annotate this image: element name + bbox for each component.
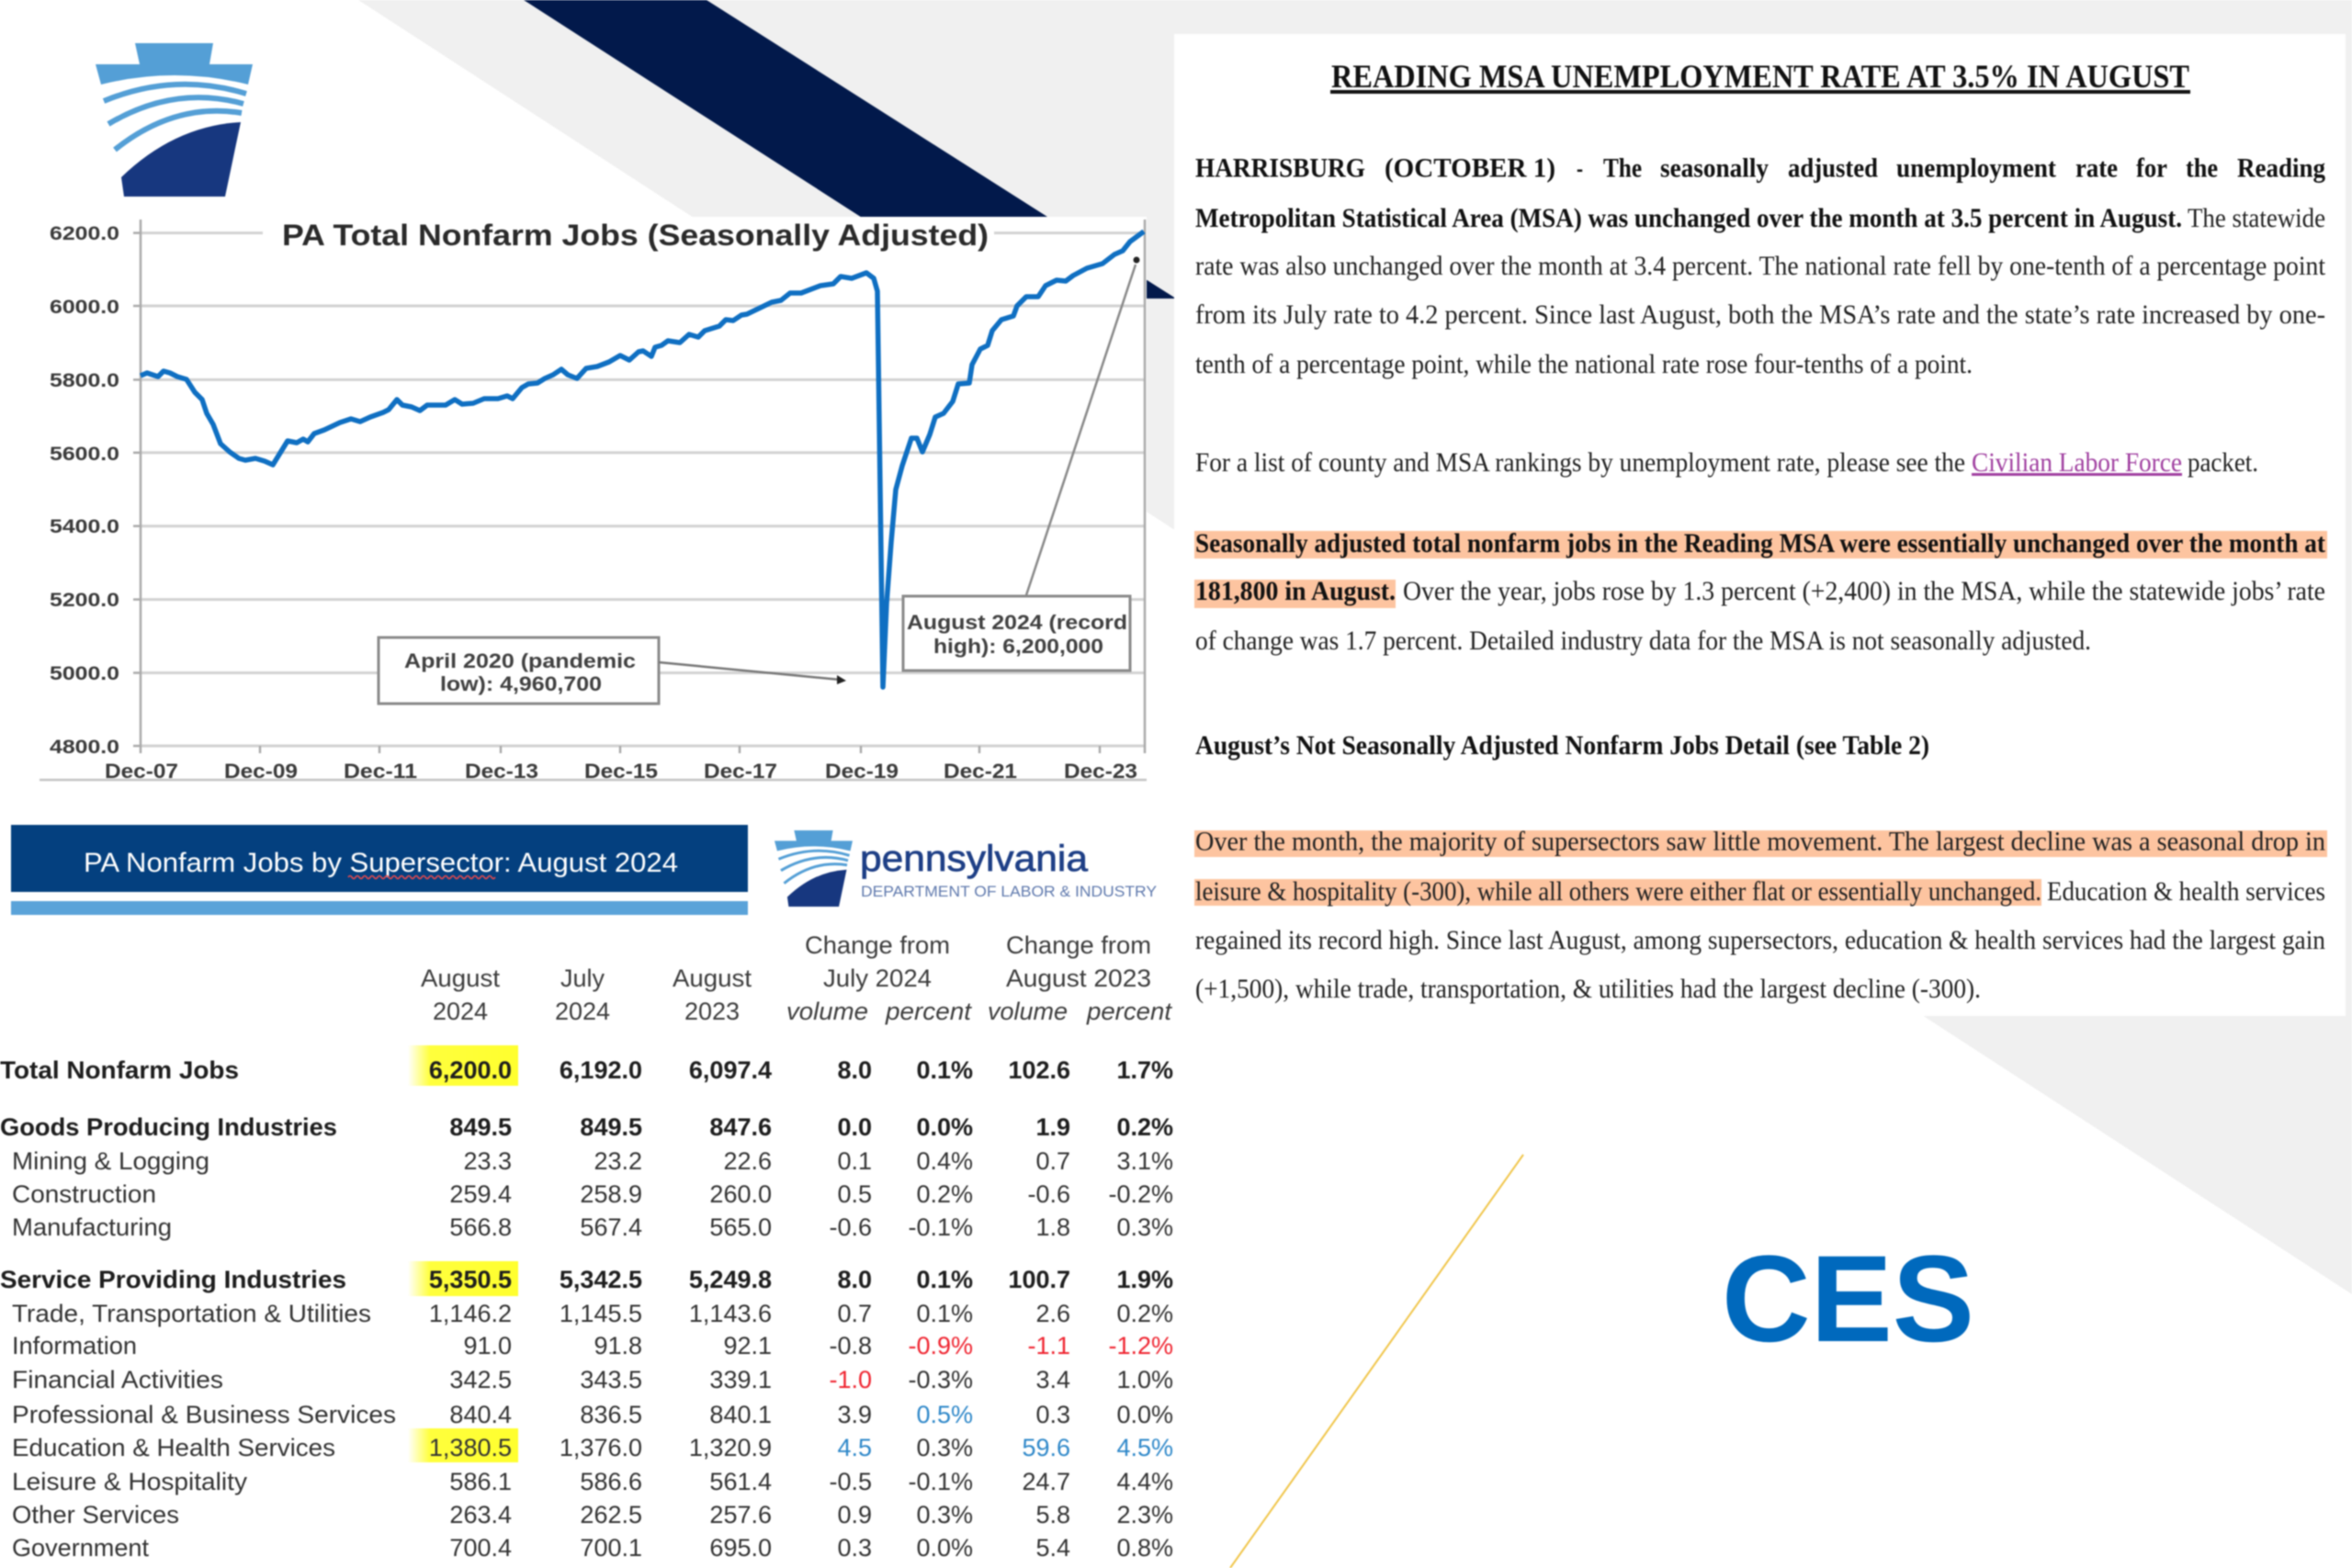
- row: Goods Producing Industries: 1.9: [1035, 1113, 1070, 1141]
- table column headers: July 2024: [823, 964, 932, 992]
- row: Total Nonfarm Jobs: 8.0: [837, 1056, 872, 1084]
- paragraph: unemployment rate: adjusted: [1788, 152, 1878, 184]
- row: Leisure and Hospitality: -0.5: [829, 1468, 872, 1495]
- paragraph: rankings link: packet.: [2188, 447, 2258, 478]
- row: Information: Information: [12, 1332, 137, 1359]
- row: Financial Activities: 342.5: [449, 1366, 512, 1393]
- x-axis labels: Dec-17: [704, 760, 777, 783]
- row: Government: Government: [12, 1534, 149, 1562]
- chart title: PA Total Nonfarm Jobs (Seasonally Adjusted): [282, 219, 989, 252]
- row: Professional and Business Services: 3.9: [837, 1401, 872, 1428]
- paragraph: rankings link: Civilian Labor Force: [1972, 447, 2182, 478]
- row: Education and Health Services: 1,320.9: [689, 1434, 772, 1461]
- row: Professional and Business Services: 0.5%: [916, 1401, 973, 1428]
- table column headers: August: [673, 964, 752, 992]
- row: Education and Health Services: Education & Health Services: [12, 1434, 335, 1461]
- row: Leisure and Hospitality: 561.4: [709, 1468, 772, 1495]
- panel: press release text: [1174, 34, 2346, 1016]
- row: Service Providing Industries: 1.9%: [1116, 1266, 1173, 1293]
- row: Mining and Logging: 23.3: [463, 1147, 512, 1175]
- logo: Pennsylvania Department of Labor and Industry: [775, 830, 1157, 907]
- paragraph: unemployment rate: for: [2136, 152, 2167, 184]
- table column headers: percent: [1086, 998, 1173, 1025]
- yellow highlight cells: [408, 1045, 518, 1462]
- paragraph: unemployment rate: rate: [2075, 152, 2118, 184]
- table column headers: Change from: [805, 931, 950, 959]
- row: Financial Activities: 339.1: [709, 1366, 772, 1393]
- row: Manufacturing: 1.8: [1035, 1213, 1070, 1241]
- x-axis labels: [105, 760, 1137, 783]
- row: Construction: 0.5: [837, 1180, 872, 1208]
- x-axis labels: Dec-13: [465, 760, 538, 783]
- row: Total Nonfarm Jobs: 0.1%: [916, 1056, 973, 1084]
- row: Trade, Transportation and Utilities: Trade, Transportation & Utilities: [12, 1300, 371, 1327]
- row: Mining and Logging: 22.6: [723, 1147, 772, 1175]
- row: Trade, Transportation and Utilities: 2.6: [1035, 1300, 1070, 1327]
- row: Goods Producing Industries: 0.0%: [916, 1113, 973, 1141]
- callout: April 2020 pandemic low: low): 4,960,700: [440, 672, 602, 695]
- row: Professional and Business Services: 0.0%: [1116, 1401, 1173, 1428]
- row: Other Services: 262.5: [580, 1501, 642, 1529]
- row: Leisure and Hospitality: -0.1%: [908, 1468, 973, 1495]
- row: Manufacturing: -0.1%: [908, 1213, 973, 1241]
- row: Leisure and Hospitality: Leisure & Hospitality: [12, 1468, 248, 1495]
- paragraph: highlighted supersectors: Education & health services: [2047, 876, 2325, 907]
- row: Mining and Logging: 0.4%: [916, 1147, 973, 1175]
- row: Government: 0.8%: [1116, 1534, 1173, 1562]
- table column headers: volume: [786, 998, 868, 1025]
- paragraph: unemployment rate: (OCTOBER 1): [1385, 152, 1555, 184]
- row: Financial Activities: 343.5: [580, 1366, 642, 1393]
- background: navy diagonal band: [524, 0, 1176, 299]
- subheading: jobs detail: August’s Not Seasonally Adjusted Nonfarm Jobs Detail (see Table 2): [1195, 730, 1929, 761]
- row: Manufacturing: 0.3%: [1116, 1213, 1173, 1241]
- row: Trade, Transportation and Utilities: 1,146.2: [429, 1300, 512, 1327]
- y-axis labels: [50, 223, 119, 758]
- callout: August 2024 record high: high): 6,200,000: [933, 635, 1103, 658]
- logo: Pennsylvania Department of Labor and Industry: DEPARTMENT OF LABOR & INDUSTRY: [861, 883, 1157, 900]
- row: Construction: [12, 1180, 1173, 1208]
- row: Total Nonfarm Jobs: 6,192.0: [560, 1056, 642, 1084]
- x-axis labels: Dec-15: [584, 760, 658, 783]
- row: Construction: 259.4: [449, 1180, 512, 1208]
- row: Mining and Logging: [12, 1147, 1173, 1175]
- arrow: to pandemic low: [659, 662, 846, 684]
- table: PA nonfarm jobs by supersector: [0, 931, 1173, 1562]
- icon: Pennsylvania keystone logo: [96, 43, 253, 197]
- row: Goods Producing Industries: 849.5: [580, 1113, 642, 1141]
- row: Other Services: Other Services: [12, 1501, 179, 1529]
- row: Trade, Transportation and Utilities: 0.2%: [1116, 1300, 1173, 1327]
- row: Total Nonfarm Jobs: Total Nonfarm Jobs: [0, 1056, 239, 1084]
- paragraph: unemployment rate: seasonally: [1660, 152, 1769, 184]
- row: Government: 695.0: [709, 1534, 772, 1562]
- row: Manufacturing: [12, 1213, 1173, 1241]
- paragraph: unemployment rate: Reading: [2237, 152, 2325, 184]
- row: Other Services: 5.8: [1035, 1501, 1070, 1529]
- table column headers: 2024: [433, 998, 488, 1025]
- row: Leisure and Hospitality: [12, 1468, 1173, 1495]
- row: Other Services: 2.3%: [1116, 1501, 1173, 1529]
- row: Mining and Logging: Mining & Logging: [12, 1147, 209, 1175]
- row: Manufacturing: 566.8: [449, 1213, 512, 1241]
- x-axis labels: Dec-09: [224, 760, 298, 783]
- row: Mining and Logging: 0.1: [837, 1147, 872, 1175]
- row: Government: 0.0%: [916, 1534, 973, 1562]
- paragraph: highlighted nonfarm jobs: [1194, 528, 2327, 656]
- row: Total Nonfarm Jobs: 1.7%: [1116, 1056, 1173, 1084]
- row: Trade, Transportation and Utilities: 1,143.6: [689, 1300, 772, 1327]
- row: Construction: 260.0: [709, 1180, 772, 1208]
- table column headers: Change from: [1006, 931, 1151, 959]
- row: Trade, Transportation and Utilities: [12, 1300, 1173, 1327]
- row: Professional and Business Services: Professional & Business Services: [12, 1401, 396, 1428]
- row: Service Providing Industries: 5,350.5: [429, 1266, 512, 1293]
- paragraph: unemployment rate: tenth of a percentage point, while the national rate rose four-tenths of a point.: [1195, 349, 1973, 379]
- row: Service Providing Industries: 5,342.5: [560, 1266, 642, 1293]
- arrow: to record high: [1026, 257, 1139, 595]
- row: Information: -0.8: [829, 1332, 872, 1359]
- row: Education and Health Services: [12, 1434, 1173, 1461]
- x-axis labels: Dec-11: [344, 760, 417, 783]
- row: Government: 0.3: [837, 1534, 872, 1562]
- paragraph: unemployment rate: unemployment: [1896, 152, 2056, 184]
- logo: Pennsylvania Department of Labor and Industry: pennsylvania: [860, 839, 1089, 879]
- callout: April 2020 pandemic low: [379, 637, 659, 704]
- y-axis labels: 5400.0: [50, 516, 119, 537]
- row: Total Nonfarm Jobs: 102.6: [1008, 1056, 1070, 1084]
- row: Information: 91.0: [463, 1332, 512, 1359]
- row: Other Services: 0.9: [837, 1501, 872, 1529]
- paragraph: highlighted nonfarm jobs: 181,800 in August.: [1195, 576, 1396, 606]
- row: Goods Producing Industries: 0.0: [837, 1113, 872, 1141]
- row: Information: [12, 1332, 1173, 1359]
- paragraph: unemployment rate: The: [1603, 152, 1642, 184]
- table column headers: July: [560, 964, 605, 992]
- row: Goods Producing Industries: [0, 1113, 1173, 1141]
- row: Mining and Logging: 23.2: [594, 1147, 642, 1175]
- row: Service Providing Industries: 5,249.8: [689, 1266, 772, 1293]
- row: Construction: 0.2%: [916, 1180, 973, 1208]
- decorative yellow diagonal line: [1230, 1155, 1523, 1568]
- row: Service Providing Industries: Service Providing Industries: [0, 1266, 346, 1293]
- row: Information: -1.1: [1027, 1332, 1070, 1359]
- row: Goods Producing Industries: 847.6: [709, 1113, 772, 1141]
- paragraph: unemployment rate: -: [1577, 152, 1583, 184]
- row: Goods Producing Industries: Goods Producing Industries: [0, 1113, 337, 1141]
- row: Total Nonfarm Jobs: [0, 1056, 1173, 1084]
- row: Trade, Transportation and Utilities: 1,145.5: [560, 1300, 642, 1327]
- callout: August 2024 record high: [903, 596, 1130, 671]
- row: Other Services: 263.4: [449, 1501, 512, 1529]
- paragraph: highlighted supersectors: leisure & hospitality (-300), while all others were either flat or essentially unchanged.: [1195, 876, 2041, 907]
- row: Financial Activities: Financial Activities: [12, 1366, 223, 1393]
- row: Professional and Business Services: [12, 1401, 1173, 1428]
- row: Government: [12, 1534, 1173, 1562]
- row: Total Nonfarm Jobs: 6,200.0: [429, 1056, 512, 1084]
- row: Government: 700.4: [449, 1534, 512, 1562]
- row: Construction: 258.9: [580, 1180, 642, 1208]
- data line: total nonfarm jobs: [141, 231, 1144, 687]
- row: Goods Producing Industries: 0.2%: [1116, 1113, 1173, 1141]
- row: Other Services: 0.3%: [916, 1501, 973, 1529]
- table column headers: August: [421, 964, 501, 992]
- row: Leisure and Hospitality: 4.4%: [1116, 1468, 1173, 1495]
- row: Government: 700.1: [580, 1534, 642, 1562]
- y-axis labels: 4800.0: [50, 737, 119, 758]
- press release headline: READING MSA UNEMPLOYMENT RATE AT 3.5% IN AUGUST: [1331, 58, 2189, 95]
- row: Education and Health Services: 1,376.0: [560, 1434, 642, 1461]
- row: Information: -1.2%: [1108, 1332, 1173, 1359]
- row: Government: 5.4: [1035, 1534, 1070, 1562]
- row: Education and Health Services: 0.3%: [916, 1434, 973, 1461]
- paragraph: highlighted nonfarm jobs: of change was 1.7 percent. Detailed industry data for the MSA is not seasonally adjusted.: [1195, 626, 2091, 656]
- y-axis labels: 5600.0: [50, 444, 119, 465]
- row: Financial Activities: [12, 1366, 1173, 1393]
- table column headers: 2023: [684, 998, 740, 1025]
- paragraph: rankings link: For a list of county and MSA rankings by unemployment rate, please see the: [1195, 447, 1965, 478]
- row: Service Providing Industries: 100.7: [1008, 1266, 1070, 1293]
- row: Manufacturing: 567.4: [580, 1213, 642, 1241]
- row: Education and Health Services: 59.6: [1022, 1434, 1070, 1461]
- row: Education and Health Services: 4.5%: [1116, 1434, 1173, 1461]
- row: Financial Activities: 3.4: [1035, 1366, 1070, 1393]
- row: Construction: -0.6: [1027, 1180, 1070, 1208]
- CES label: CES: [1722, 1231, 1974, 1368]
- row: Other Services: 257.6: [709, 1501, 772, 1529]
- row: Information: 91.8: [594, 1332, 642, 1359]
- row: Manufacturing: -0.6: [829, 1213, 872, 1241]
- callout: April 2020 pandemic low: April 2020 (pandemic: [404, 649, 636, 672]
- x-axis labels: Dec-21: [944, 760, 1017, 783]
- panel: line chart of PA total nonfarm jobs: [0, 217, 1147, 783]
- row: Mining and Logging: 0.7: [1035, 1147, 1070, 1175]
- row: Professional and Business Services: 840.1: [709, 1401, 772, 1428]
- row: Leisure and Hospitality: 586.6: [580, 1468, 642, 1495]
- table column headers: percent: [885, 998, 973, 1025]
- paragraph: unemployment rate: Metropolitan Statistical Area (MSA) was unchanged over the month at 3.5 percent in August.: [1195, 203, 2182, 233]
- row: Trade, Transportation and Utilities: 0.1%: [916, 1300, 973, 1327]
- row: Education and Health Services: 4.5: [837, 1434, 872, 1461]
- row: Trade, Transportation and Utilities: 0.7: [837, 1300, 872, 1327]
- x-axis labels: Dec-07: [105, 760, 178, 783]
- table column headers: 2024: [555, 998, 610, 1025]
- row: Manufacturing: Manufacturing: [12, 1213, 172, 1241]
- y-axis labels: 6000.0: [50, 297, 119, 318]
- row: Service Providing Industries: 0.1%: [916, 1266, 973, 1293]
- row: Financial Activities: -0.3%: [908, 1366, 973, 1393]
- row: Construction: Construction: [12, 1180, 156, 1208]
- paragraph: unemployment rate: the: [2186, 152, 2218, 184]
- row: Total Nonfarm Jobs: 6,097.4: [689, 1056, 772, 1084]
- y-axis labels: 5200.0: [50, 590, 119, 611]
- y-axis labels: 5800.0: [50, 370, 119, 391]
- row: Leisure and Hospitality: 24.7: [1022, 1468, 1070, 1495]
- row: Construction: -0.2%: [1108, 1180, 1173, 1208]
- panel: table banner: PA Nonfarm Jobs by Supersector: August 2024: [84, 848, 678, 878]
- paragraph: highlighted supersectors: [1194, 827, 2327, 1004]
- row: Financial Activities: -1.0: [829, 1366, 872, 1393]
- row: Information: 92.1: [723, 1332, 772, 1359]
- row: Leisure and Hospitality: 586.1: [449, 1468, 512, 1495]
- table column headers: [421, 931, 1173, 1025]
- y-axis labels: 6200.0: [50, 223, 119, 244]
- row: Service Providing Industries: 8.0: [837, 1266, 872, 1293]
- callout: August 2024 record high: August 2024 (record: [907, 611, 1127, 634]
- panel: table banner: [11, 825, 748, 915]
- row: Professional and Business Services: 836.5: [580, 1401, 642, 1428]
- row: Education and Health Services: 1,380.5: [429, 1434, 512, 1461]
- paragraph: unemployment rate: The statewide: [2188, 203, 2325, 233]
- y-axis labels: 5000.0: [50, 663, 119, 684]
- x-axis labels: Dec-19: [825, 760, 899, 783]
- table column headers: August 2023: [1006, 964, 1151, 992]
- row: Other Services: [12, 1501, 1173, 1529]
- row: Professional and Business Services: 0.3: [1035, 1401, 1070, 1428]
- paragraph: highlighted supersectors: (+1,500), while trade, transportation, & utilities had the largest decline (-300).: [1195, 974, 1981, 1004]
- row: Mining and Logging: 3.1%: [1116, 1147, 1173, 1175]
- row: Goods Producing Industries: 849.5: [449, 1113, 512, 1141]
- row: Financial Activities: 1.0%: [1116, 1366, 1173, 1393]
- table column headers: volume: [988, 998, 1068, 1025]
- background: light gray diagonal field: [358, 0, 2352, 1294]
- row: Service Providing Industries: [0, 1266, 1173, 1293]
- paragraph: unemployment rate: HARRISBURG: [1195, 152, 1365, 184]
- row: Manufacturing: 565.0: [709, 1213, 772, 1241]
- paragraph: unemployment rate: [1195, 152, 2326, 379]
- x-axis labels: Dec-23: [1064, 760, 1137, 783]
- row: Information: -0.9%: [908, 1332, 973, 1359]
- row: Professional and Business Services: 840.4: [449, 1401, 512, 1428]
